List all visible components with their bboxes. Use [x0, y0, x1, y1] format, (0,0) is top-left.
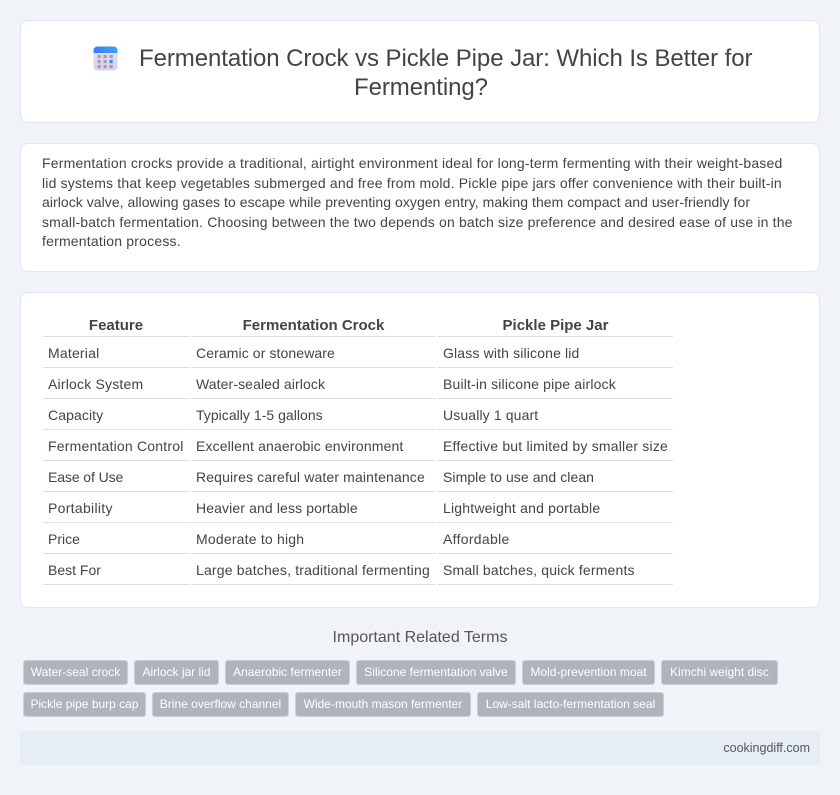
comparison table: Material — [48, 345, 99, 361]
comparison table: Fermentation Control — [48, 438, 184, 454]
comparison table: Usually 1 quart — [443, 407, 538, 423]
related terms tags: Mold-prevention moat — [530, 665, 647, 679]
comparison table: Capacity — [48, 407, 103, 423]
related terms tags: Brine overflow channel — [160, 697, 281, 711]
related terms heading: Important Related Terms — [333, 629, 507, 646]
comparison table: Lightweight and portable — [443, 500, 600, 516]
comparison table: Typically 1-5 gallons — [196, 407, 323, 423]
comparison table: Large batches, traditional fermenting — [196, 562, 430, 578]
related terms tags: Water-seal crock — [31, 665, 120, 679]
related terms tags: Pickle pipe burp cap — [30, 697, 139, 711]
column headers — [43, 317, 673, 585]
comparison table: Portability — [48, 500, 113, 516]
intro paragraph: Fermentation crocks provide a traditional, airtight environment ideal for long-term fermenting with their weight-based — [42, 155, 782, 171]
comparison table: Built-in silicone pipe airlock — [443, 376, 616, 392]
intro paragraph — [42, 155, 793, 249]
related terms tags: Anaerobic fermenter — [233, 665, 342, 679]
comparison table: Ease of Use — [48, 469, 123, 485]
column headers: Pickle Pipe Jar — [503, 317, 608, 334]
intro paragraph: fermentation process. — [42, 233, 181, 249]
comparison table: Affordable — [443, 531, 510, 547]
related terms tags — [23, 660, 778, 717]
column headers: Fermentation Crock — [243, 317, 384, 334]
comparison table — [43, 317, 673, 585]
comparison table: Excellent anaerobic environment — [196, 438, 403, 454]
comparison table: Price — [48, 531, 80, 547]
heading: Fermentation Crock vs Pickle Pipe Jar: Which Is Better for — [139, 45, 752, 72]
heading: Fermenting? — [354, 74, 488, 101]
title card — [20, 20, 820, 123]
intro paragraph: airlock valve, allowing gases to escape while preventing oxygen entry, making them compact and user-friendly for — [42, 194, 750, 210]
comparison table panel — [20, 292, 820, 608]
related terms tags: Kimchi weight disc — [670, 665, 769, 679]
related terms tags: Low-salt lacto-fermentation seal — [486, 697, 655, 711]
related terms tags: Silicone fermentation valve — [364, 665, 508, 679]
footer source text: cookingdiff.com — [723, 741, 810, 755]
intro text panel — [20, 143, 820, 272]
comparison table: Small batches, quick ferments — [443, 562, 635, 578]
related terms tags: Airlock jar lid — [142, 665, 210, 679]
comparison table: Requires careful water maintenance — [196, 469, 425, 485]
intro paragraph: small-batch fermentation. Choosing between the two depends on batch size preference and desired ease of use in the — [42, 214, 793, 230]
icon: calendar — [94, 46, 118, 70]
comparison table: Effective but limited by smaller size — [443, 438, 668, 454]
comparison table: Glass with silicone lid — [443, 345, 580, 361]
heading — [139, 45, 752, 101]
comparison table: Best For — [48, 562, 101, 578]
comparison table: Airlock System — [48, 376, 143, 392]
comparison table: Moderate to high — [196, 531, 304, 547]
intro paragraph: lid systems that keep vegetables submerged and free from mold. Pickle pipe jars offer convenience with their built-in — [42, 174, 782, 190]
comparison table: Simple to use and clean — [443, 469, 594, 485]
column headers: Feature — [89, 317, 143, 334]
footer bar — [20, 731, 820, 765]
comparison table: Heavier and less portable — [196, 500, 358, 516]
comparison table: Ceramic or stoneware — [196, 345, 335, 361]
comparison table: Water-sealed airlock — [196, 376, 325, 392]
related terms tags: Wide-mouth mason fermenter — [304, 697, 462, 711]
